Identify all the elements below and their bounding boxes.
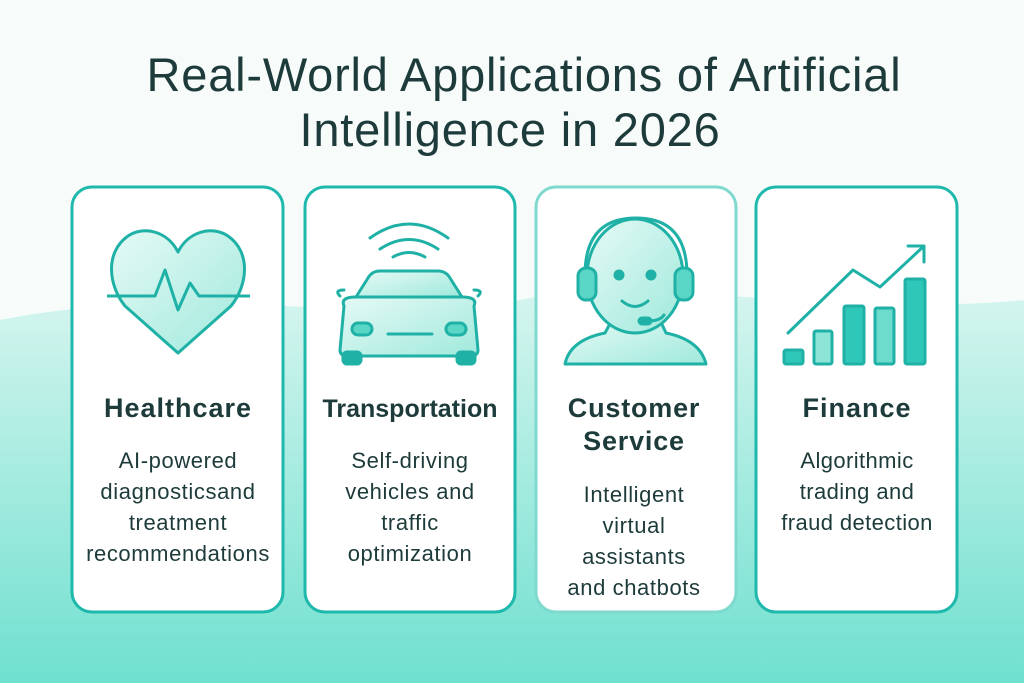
text block: fraud detection (781, 510, 933, 535)
text block: Algorithmic (800, 448, 914, 473)
title: Real-World Applications of Artificial (147, 48, 901, 101)
text block: diagnosticsand (100, 479, 256, 504)
panel: customer service (536, 187, 736, 612)
panel: transportation (305, 187, 515, 612)
icon: support agent (565, 218, 706, 364)
heading: Service (583, 426, 685, 456)
panel: finance (756, 187, 957, 612)
heading: Finance (802, 393, 912, 423)
text block: vehicles and (345, 479, 475, 504)
text block: recommendations (86, 541, 270, 566)
icon: growth chart (784, 246, 925, 364)
text block (345, 448, 475, 566)
text block (567, 482, 701, 600)
heading: Healthcare (104, 393, 252, 423)
icon: heart (107, 231, 250, 353)
text block: trading and (800, 479, 914, 504)
text block: virtual (603, 513, 665, 538)
text block: assistants (582, 544, 686, 569)
text block (781, 448, 933, 535)
text block (86, 448, 270, 566)
heading (568, 393, 700, 456)
title (147, 48, 901, 156)
text block: Self-driving (351, 448, 469, 473)
title: Intelligence in 2026 (299, 103, 721, 156)
text block: AI-powered (119, 448, 237, 473)
text block: optimization (348, 541, 472, 566)
text block: Intelligent (584, 482, 684, 507)
heading: Customer (568, 393, 700, 423)
panel: healthcare (72, 187, 283, 612)
text block: and chatbots (567, 575, 701, 600)
heading: Transportation (322, 395, 498, 423)
icon: car (338, 224, 480, 364)
text block: treatment (129, 510, 227, 535)
text block: traffic (381, 510, 439, 535)
